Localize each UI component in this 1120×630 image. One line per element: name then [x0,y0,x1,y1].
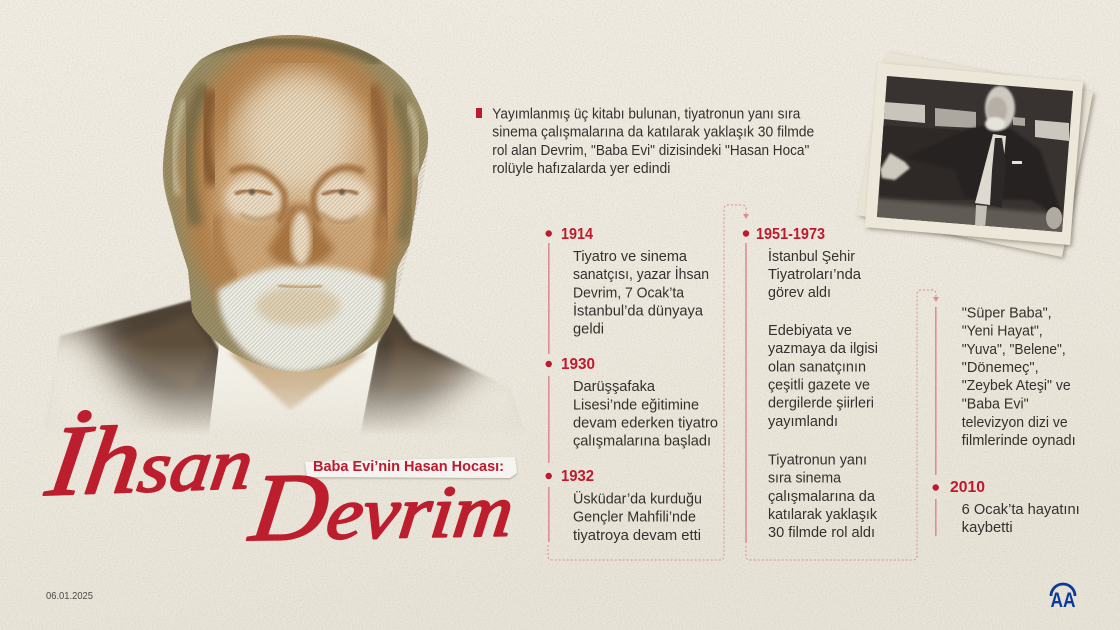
jacket [58,298,494,432]
timeline column 2: yayımlandı [768,414,838,430]
timeline column 3: "Süper Baba", [962,305,1052,321]
timeline column 3: "Yeni Hayat", [962,324,1043,340]
timeline column 2: İstanbul Şehir [768,247,855,265]
timeline column 1: İstanbul’da dünyaya [573,302,704,320]
timeline column 3: "Yuva", "Belene", [962,342,1066,358]
title: Devrim: Devrim [243,450,520,561]
timeline column 2: çalışmalarına da [768,489,876,505]
timeline column 1: Gençler Mahfili’nde [573,510,696,526]
timeline column 2: yazmaya da ilgisi [768,341,878,357]
timeline column 1 [546,226,718,544]
photograph [877,76,1073,232]
timeline column 1: Tiyatro ve sinema [573,249,688,265]
halftone texture [164,35,428,372]
framed photo [857,52,1093,257]
timeline column 1: devam ederken tiyatro [573,416,718,432]
timeline column 1: Lisesi’nde eğitimine [573,397,699,413]
eye sockets [225,175,285,221]
title: İhsan: İhsan [40,398,261,517]
timeline column 2 [743,226,878,543]
timeline column 2: 30 filmde rol aldı [768,525,875,541]
icon: AA logo: AA [1050,589,1076,612]
intro text: rol alan Devrim, "Baba Evi" dizisindeki "Hasan Hoca" [492,143,809,159]
shirt and tie [975,134,1006,205]
timeline column 1: 1914 [561,226,593,243]
timeline column 3: "Dönemeç", [962,360,1039,376]
shirt [210,342,378,432]
timeline column 2: Tiyatroları’nda [768,267,862,283]
neck [228,352,368,410]
connector arrows [743,214,939,302]
intro text: rolüyle hafızalarda yer edindi [492,161,670,177]
intro text: sinema çalışmalarına da katılarak yaklaşık 30 filmde [492,125,814,141]
timeline column 2: katılarak yaklaşık [768,507,878,523]
cheeks shading [215,215,235,282]
suit [905,125,1062,215]
timeline column 3: "Baba Evi" [962,396,1029,412]
hair streaks [188,85,205,225]
timeline connectors [548,205,936,560]
brows [230,168,285,222]
timeline column 2: Tiyatronun yanı [768,452,867,468]
icon: AA logo [1050,584,1076,612]
timeline column 3: 2010 [950,479,985,496]
intro text [476,106,814,177]
subtitle strip [305,457,517,478]
timeline column 3: kaybetti [962,520,1013,536]
timeline column 1: Devrim, 7 Ocak’ta [573,285,685,301]
timeline column 2: Edebiyata ve [768,323,852,339]
head [985,86,1015,130]
hands [880,153,910,180]
timeline column 1: çalışmalarına başladı [573,434,711,450]
timeline column 1: sanatçısı, yazar İhsan [573,265,709,283]
timeline column 2: çeşitli gazete ve [768,378,870,394]
eyes [235,190,272,195]
timeline column 1: 1932 [561,468,594,485]
date: 06.01.2025 [46,590,93,602]
red square bullet [476,108,482,118]
timeline column 1: Üsküdar’da kurduğu [573,490,702,508]
timeline column 1: Darüşşafaka [573,379,656,395]
intro text: Yayımlanmış üç kitabı bulunan, tiyatronun yanı sıra [492,106,801,122]
timeline column 2: dergilerde şiirleri [768,396,874,412]
back paper [857,52,1093,257]
timeline column 2: 1951-1973 [756,226,825,243]
timeline column 3 [932,305,1080,536]
timeline column 2: sıra sinema [768,470,842,486]
front paper [865,63,1083,245]
head [162,35,428,372]
timeline column 3: televizyon dizi ve [962,415,1068,431]
timeline column 1: tiyatroya devam etti [573,528,701,544]
subtitle strip: Baba Evi’nin Hasan Hocası: [313,459,504,475]
nose [268,205,334,268]
timeline column 3: 6 Ocak’ta hayatını [962,502,1080,518]
timeline column 1: 1930 [561,356,595,373]
timeline column 3: "Zeybek Ateşi" ve [962,378,1071,394]
timeline column 2: görev aldı [768,285,831,301]
timeline column 3: filmlerinde oynadı [962,433,1076,449]
beard [218,266,384,372]
portrait of İhsan Devrim [58,35,494,432]
timeline column 2: olan sanatçının [768,360,866,376]
timeline column 1: geldi [573,322,604,338]
